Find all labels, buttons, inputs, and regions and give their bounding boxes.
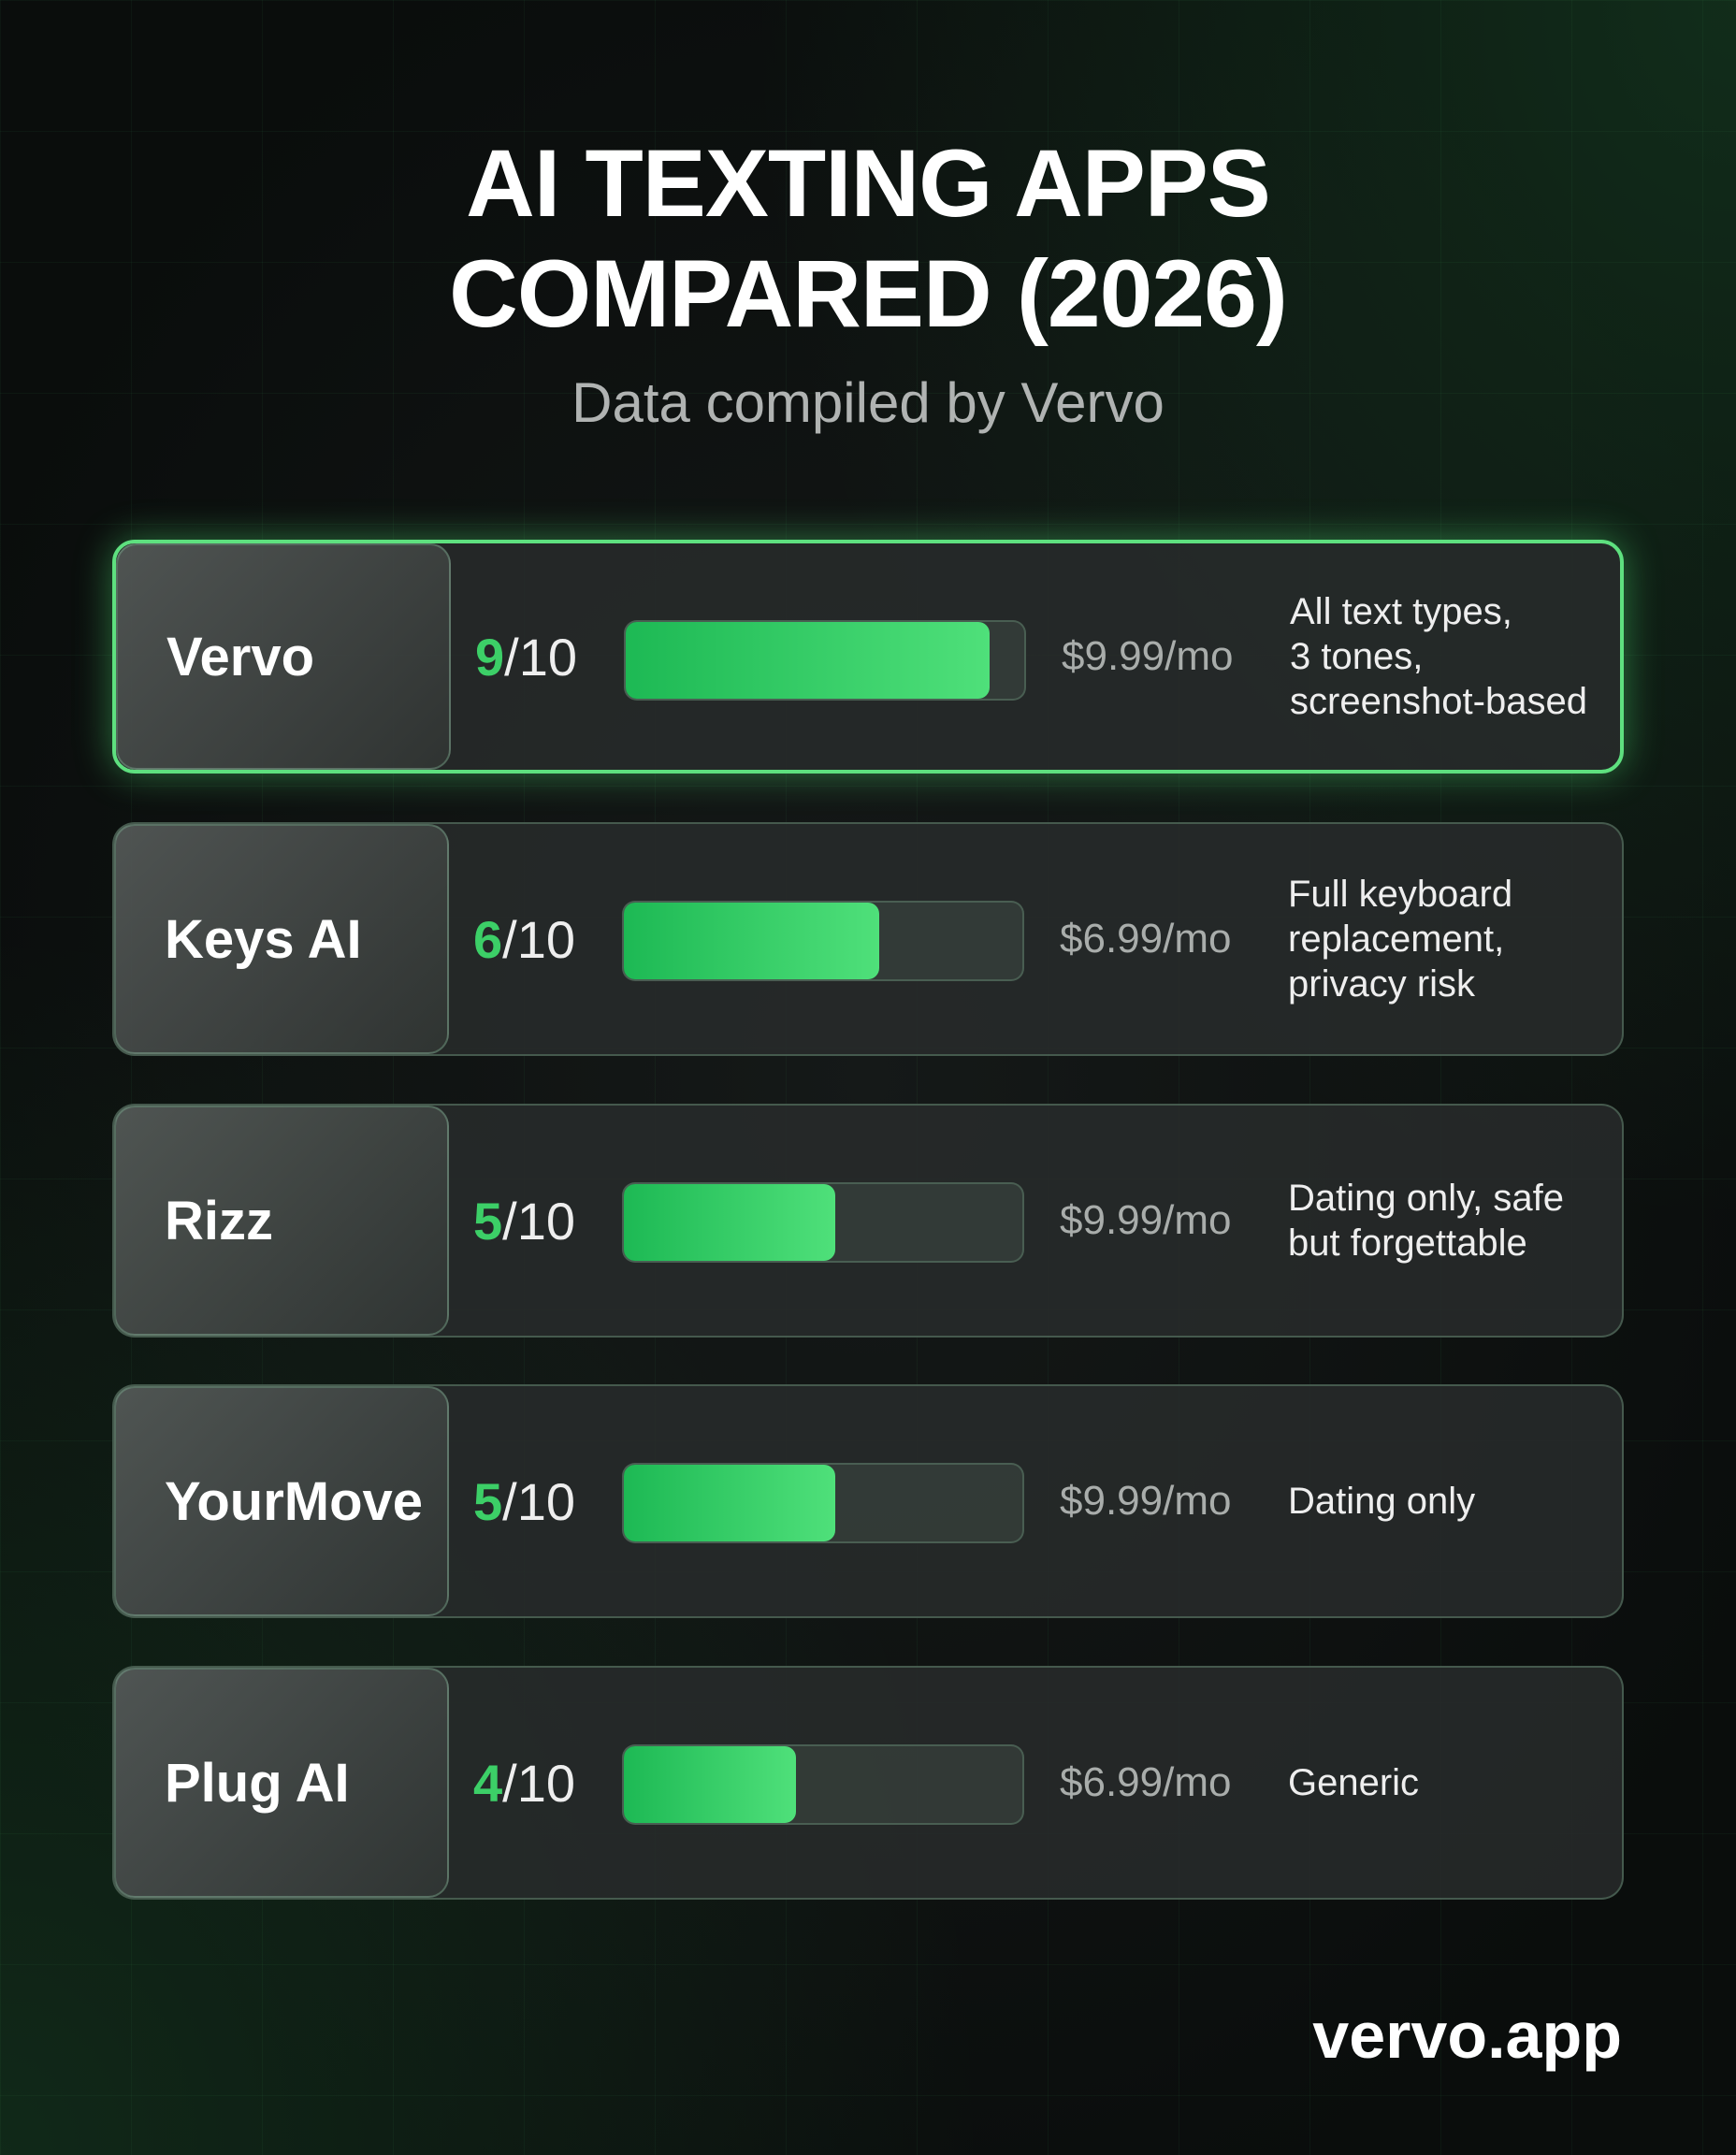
footer url: vervo.app — [1312, 1999, 1622, 2072]
title: AI TEXTING APPS — [466, 130, 1270, 237]
row: Vervo: $9.99/mo — [1062, 633, 1233, 679]
row: YourMove: 5/10 — [473, 1472, 575, 1530]
row: Keys AI: replacement, — [1288, 918, 1504, 960]
row: Vervo — [112, 540, 1624, 774]
subtitle: Data compiled by Vervo — [571, 371, 1165, 434]
row: Vervo: 9/10 — [475, 627, 577, 687]
row: Rizz: but forgettable — [1288, 1222, 1527, 1264]
row: Rizz: 5/10 — [473, 1192, 575, 1250]
row: Plug AI: $6.99/mo — [1060, 1759, 1231, 1805]
row: Rizz: $9.99/mo — [1060, 1197, 1231, 1243]
row: Plug AI: 4/10 — [473, 1753, 575, 1813]
row: Vervo: Vervo — [166, 627, 314, 687]
row: Keys AI — [112, 822, 1624, 1056]
title — [449, 130, 1287, 347]
row: Vervo: screenshot-based — [1290, 681, 1587, 722]
row: Plug AI — [112, 1666, 1624, 1900]
row: YourMove: $9.99/mo — [1060, 1478, 1231, 1524]
row: Rizz — [112, 1104, 1624, 1338]
row: YourMove: YourMove — [165, 1470, 423, 1532]
row: Vervo: 3 tones, — [1290, 636, 1423, 677]
row: Plug AI: Plug AI — [165, 1753, 350, 1813]
row: YourMove — [112, 1384, 1624, 1618]
row: Vervo: All text types, — [1290, 591, 1512, 632]
row: Rizz: Rizz — [165, 1190, 273, 1251]
row: Keys AI: privacy risk — [1288, 963, 1475, 1005]
row: Keys AI: Keys AI — [165, 909, 362, 969]
title: COMPARED (2026) — [449, 240, 1287, 347]
row: Keys AI: 6/10 — [473, 909, 575, 969]
row: Rizz: Dating only, safe — [1288, 1178, 1564, 1219]
row: YourMove: Dating only — [1288, 1481, 1475, 1522]
row: Keys AI: $6.99/mo — [1060, 916, 1231, 962]
row: Keys AI: Full keyboard — [1288, 874, 1512, 915]
row: Plug AI: Generic — [1288, 1762, 1419, 1803]
